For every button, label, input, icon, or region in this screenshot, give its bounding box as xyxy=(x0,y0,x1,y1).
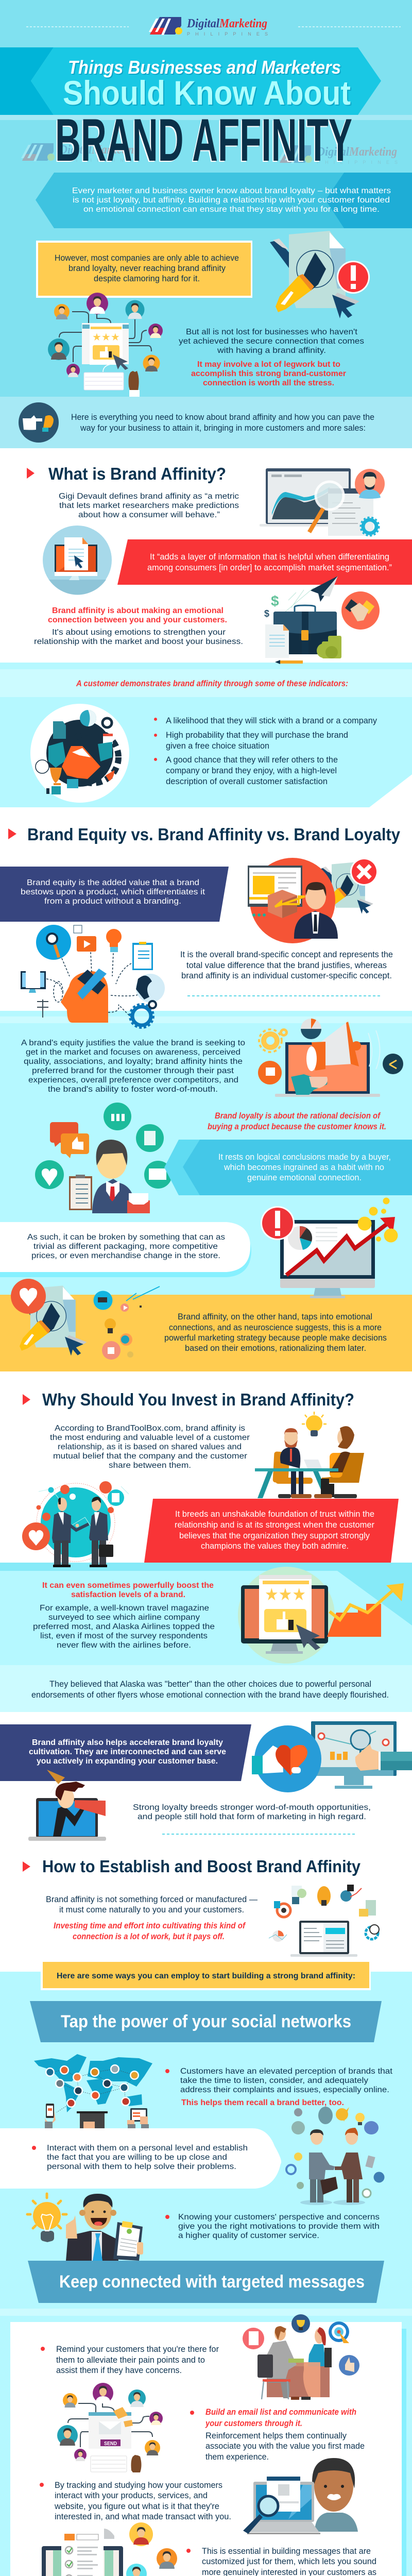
ribbon: logical conclusions: It rests on logical conclusions made by a buyer, xyxy=(218,1152,391,1162)
list item: remind customers: Remind your customers that you're there for xyxy=(56,2344,219,2354)
text block: brand equity justifies: A brand's equity justifies the value the brand is seeking to xyxy=(21,1039,245,1047)
title: Should Know About xyxy=(63,74,351,112)
text block: brand loyalty: buying a product because the customer knows it. xyxy=(208,1122,386,1131)
text block: affinity on yellow xyxy=(164,1312,387,1353)
text block: brand loyalty: Brand loyalty is about the rational decision of xyxy=(215,1111,381,1121)
title: Things Businesses and Marketers xyxy=(68,57,341,78)
list item: tracking: interested in, and what made transact with you. xyxy=(55,2512,231,2521)
text block: affinity on yellow: based on their emotions, rationalizing them later. xyxy=(185,1343,366,1353)
illustration: laptop with business icons xyxy=(269,1885,379,1957)
text block: satisfaction example xyxy=(33,1581,215,1650)
illustration: businessmen handshake xyxy=(22,1481,129,1567)
text block: definition: Gigi Devault defines brand affinity as “a metric xyxy=(59,492,239,501)
text block: not forced xyxy=(46,1894,258,1941)
red panel: trust: relationship and is at its strongest when the customer xyxy=(175,1520,374,1530)
text block: not lost: yet achieved the secure connection that comes xyxy=(179,337,364,346)
text block: brandtoolbox: According to BrandToolBox.com, brand affinity is xyxy=(55,1424,245,1433)
ribbon: logical conclusions: genuine emotional connection. xyxy=(247,1173,362,1182)
illustration: heart and thumbs up monitor xyxy=(252,1721,412,1792)
text block: not lost: But all is not lost for businesses who haven't xyxy=(186,328,358,336)
icon: handshake gear in white circle xyxy=(30,704,129,803)
list item: essential messages: customized just for them, which lets you sound xyxy=(202,2556,376,2566)
list item: essential messages xyxy=(186,2546,376,2576)
text block: brand equity justifies: quality, associations, and loyalty; brand affinity hints the xyxy=(24,1057,243,1066)
red panel: trust: believes that the organization they support strongly xyxy=(179,1531,370,1540)
illustration: pen tool with heart and icons xyxy=(11,1279,160,1360)
text block: satisfaction example: never flew with the airlines before. xyxy=(57,1641,191,1650)
white pill: interact: personal with them to help solve their problems. xyxy=(47,2162,236,2171)
text block: brandtoolbox: relationship, as it is based on shared values and xyxy=(58,1443,242,1451)
text block: not lost xyxy=(179,328,364,387)
list item: remind customers: them to alleviate their pain points and to xyxy=(56,2355,205,2365)
white pill: can be broken: As such, it can be broken by something that can as xyxy=(27,1233,225,1242)
list: indicators: A good chance that they will refer others to the xyxy=(166,755,338,765)
text block: overall concept: brand affinity is an individual customer-specific concept. xyxy=(181,971,392,980)
ribbon: logical conclusions xyxy=(164,1140,412,1195)
text block: not lost: accomplish this strong brand-customer xyxy=(191,369,346,378)
intro ribbon: is not just loyalty, but affinity. Building a relationship with your customer founded xyxy=(73,196,390,205)
illustration: email network: SEND xyxy=(104,2441,117,2447)
list item: tracking: interact with your products, services, and xyxy=(55,2490,208,2500)
title xyxy=(21,57,398,174)
ribbon: logical conclusions: which becomes ingrained as a habit with no xyxy=(224,1162,384,1172)
red panel: trust: champions the values they both admire. xyxy=(201,1541,349,1551)
red panel: trust: It breeds an unshakable foundation of trust within the xyxy=(175,1509,374,1519)
callout: ways to build xyxy=(41,1962,371,1990)
callout: yellow box xyxy=(36,241,252,298)
text block: they believed xyxy=(31,1679,389,1700)
illustration: head with ideas xyxy=(21,925,165,1028)
list: indicators: company or brand they enjoy, with a high-level xyxy=(166,766,337,775)
intro ribbon: on emotional connection can ensure that they stay with you for a long time. xyxy=(83,205,380,214)
white pill: can be broken: trivial as different packaging, more competitive xyxy=(33,1242,218,1251)
illustration: rating monitor and growth chart xyxy=(238,1567,404,1664)
text block: not lost: with having a brand affinity. xyxy=(217,346,326,355)
heading: why invest: Why Should You Invest in Brand Affinity? xyxy=(42,1390,354,1409)
illustration: office consultation xyxy=(243,2314,359,2400)
text block: affinity on yellow: Brand affinity, on the other hand, taps into emotional xyxy=(178,1312,372,1321)
text block: brandtoolbox: the most enduring and valuable level of a customer xyxy=(50,1433,250,1442)
text block: brand loyalty xyxy=(208,1111,386,1131)
list item: elevated perception: address their complaints and issues, especially online. xyxy=(180,2086,389,2094)
list item: customers' perspective: give you the right motivations to provide them with xyxy=(178,2222,380,2231)
illustration: man with laptop and magnifier xyxy=(243,2458,358,2534)
text block: what you need to know: Here is everything you need to know about brand affinity and how you can pave the xyxy=(71,412,374,422)
text block: satisfaction example: preferred most, and Alaska Airlines topped the xyxy=(33,1622,215,1631)
illustration: partners shaking hands xyxy=(286,2107,384,2205)
heading: how to establish: How to Establish and Boost Brand Affinity xyxy=(42,1857,361,1876)
list: indicators: given a free choice situation xyxy=(166,741,269,751)
list: indicators: description of overall customer satisfaction xyxy=(166,776,328,786)
text block: emotional connection: It's about using emotions to strengthen your xyxy=(52,628,226,637)
white pill: interact: the fact that you are willing to be up close and xyxy=(47,2153,227,2162)
red quote banner: It “adds a layer of information that is helpful when differentiating xyxy=(150,552,389,562)
callout: ways to build: Here are some ways you can employ to start building a strong brand affinity: xyxy=(57,1972,355,1980)
icon: monitor on blue circle xyxy=(43,526,112,595)
text block: emotional connection xyxy=(34,606,243,646)
white pill: interact xyxy=(0,2128,281,2189)
illustration: monitor with rising arrow xyxy=(261,1197,398,1298)
list item: elevated perception: This helps them recall a brand better, too. xyxy=(181,2098,344,2107)
illustration: businessman with product xyxy=(248,858,378,943)
text block: brand equity justifies: get in the market and focuses on awareness, perceived xyxy=(26,1048,241,1057)
list item: remind customers: assist them if they have concerns. xyxy=(56,2365,182,2375)
text block: strong loyalty: Strong loyalty breeds stronger word-of-mouth opportunities, xyxy=(133,1803,371,1812)
text block: not forced: Brand affinity is not something forced or manufactured — xyxy=(46,1894,258,1904)
callout: yellow box: brand loyalty, never reaching brand affinity xyxy=(68,263,226,273)
white pill: interact: Interact with them on a personal level and establish xyxy=(47,2144,248,2153)
navy panel: brand equity definition: from a product without a branding. xyxy=(44,897,181,906)
callout: yellow box: despite clamoring hard for it. xyxy=(94,274,200,283)
banner: keep connected xyxy=(28,2261,384,2303)
heading: what is brand affinity: What is Brand Affinity? xyxy=(48,464,226,483)
text block: overall concept: total value difference that the brand justifies, whereas xyxy=(186,960,387,970)
text block: emotional connection: relationship with the market and boost your business. xyxy=(34,637,243,646)
callout: yellow box: However, most companies are only able to achieve xyxy=(55,253,239,263)
navy panel: accelerates loyalty: Brand affinity also helps accelerate brand loyalty xyxy=(32,1738,223,1747)
text block: brandtoolbox: mutual belief that the company and the customer xyxy=(53,1452,247,1461)
white pill: can be broken xyxy=(0,1222,251,1277)
illustration: two men meeting xyxy=(255,1412,364,1498)
logo: top header xyxy=(26,17,401,37)
illustration: monitor checklist and avatars xyxy=(42,2522,177,2576)
illustration: rating monitor and growth chart: ★★★ xyxy=(265,1585,306,1604)
text block: brand equity justifies: the brand's ability to foster word-of-mouth. xyxy=(48,1085,218,1094)
title ribbon xyxy=(0,47,381,115)
text block: affinity on yellow: connections, and as neuroscience suggests, this is a more xyxy=(169,1323,382,1332)
text block: emotional connection: Brand affinity is about making an emotional xyxy=(52,606,224,615)
banner: keep connected: Keep connected with targeted messages xyxy=(59,2272,365,2292)
list item: email list: Reinforcement helps them continually xyxy=(205,2431,347,2441)
illustration: man with megaphone on laptop xyxy=(28,1770,106,1841)
illustration: briefcase and coins: $ xyxy=(264,608,269,619)
illustration: megaphone on screen xyxy=(258,1019,403,1097)
illustration: customer network with rating panel xyxy=(48,293,163,397)
navy panel: brand equity definition: Brand equity is the added value that a brand xyxy=(27,878,199,887)
text block: emotional connection: connection between you and your customers. xyxy=(48,616,227,624)
text block: overall concept xyxy=(180,950,393,996)
text block: brandtoolbox xyxy=(50,1424,250,1470)
illustration: world map with people xyxy=(34,2054,152,2128)
list item: email list xyxy=(190,2407,365,2462)
text block: satisfaction example: It can even sometimes powerfully boost the xyxy=(42,1581,214,1590)
list item: email list: your customers through it. xyxy=(205,2418,302,2428)
red panel: trust xyxy=(144,1499,399,1563)
list item: tracking: website, you figure out what is it that they're xyxy=(54,2501,219,2511)
illustration: email network xyxy=(57,2383,163,2472)
text block: brand equity justifies xyxy=(21,1039,245,1094)
icon: pointing hand and bulb xyxy=(19,402,59,443)
navy panel: accelerates loyalty: cultivation. They are interconnected and can serve xyxy=(29,1748,226,1756)
list item: tracking: By tracking and studying how your customers xyxy=(55,2480,222,2490)
navy panel: brand equity definition xyxy=(0,867,229,922)
text block: definition: that lets market researchers make predictions xyxy=(59,501,239,510)
illustration: man with bulb and clipboard xyxy=(27,2194,143,2261)
text block: not lost: It may involve a lot of legwork but to xyxy=(197,360,340,369)
text block: strong loyalty: and people still hold that form of marketing in high regard. xyxy=(138,1812,366,1821)
callout: indicators heading: A customer demonstrates brand affinity through some of these indicators: xyxy=(76,679,348,688)
list item: customers' perspective: a higher quality of customer service. xyxy=(178,2231,319,2240)
text block: strong loyalty xyxy=(133,1803,371,1834)
text block: not forced: connection is a lot of work, but it pays off. xyxy=(73,1931,225,1941)
illustration: briefcase and coins: $ xyxy=(271,593,279,609)
text block: not forced: it must come naturally to you and your customers. xyxy=(59,1905,244,1914)
list item: elevated perception: Customers have an elevated perception of brands that xyxy=(180,2067,393,2076)
list item: email list: them experience. xyxy=(205,2452,269,2462)
text block: not lost: connection is worth all the stress. xyxy=(203,379,334,387)
text block: satisfaction example: For example, a well-known travel magazine xyxy=(40,1604,209,1613)
list item: tracking xyxy=(40,2480,231,2521)
text block: affinity on yellow: powerful marketing strategy because people make decisions xyxy=(164,1333,387,1343)
text block: brand equity justifies: preferred brand for the customer through their past xyxy=(32,1066,234,1075)
list item: email list: Build an email list and communicate with xyxy=(205,2407,356,2417)
list item: elevated perception xyxy=(165,2067,393,2107)
text block: not forced: Investing time and effort into cultivating this kind of xyxy=(54,1921,246,1930)
text block: satisfaction example: satisfaction levels of a brand. xyxy=(71,1590,185,1599)
rating stars: ★★★ xyxy=(92,332,120,343)
red quote banner: among consumers [in order] to accomplish market segmentation.” xyxy=(147,563,392,572)
text block: definition xyxy=(59,492,239,519)
text block: they believed: endorsements of other flyers whose emotional connection with the brand have deeply flourished. xyxy=(31,1690,389,1700)
illustration: briefcase and coins xyxy=(264,576,380,664)
list item: essential messages: This is essential in building messages that are xyxy=(202,2546,371,2556)
list item: customers' perspective xyxy=(165,2213,380,2240)
navy panel: brand equity definition: bestows upon a product, which differentiates it xyxy=(21,888,205,896)
navy panel: accelerates loyalty: you actively in expanding your customer base. xyxy=(37,1757,218,1766)
text block: they believed: They believed that Alaska was "better" than the other choices due to powerful personal xyxy=(49,1679,371,1689)
list item: elevated perception: take the time to listen, consider, and adequately xyxy=(180,2076,368,2085)
list item: customers' perspective: Knowing your customers' perspective and concerns xyxy=(178,2213,380,2222)
watermark logos xyxy=(21,143,398,165)
banner: tap the power xyxy=(30,2001,382,2042)
list item: email list: associate you with the value you first made xyxy=(205,2441,365,2451)
intro ribbon xyxy=(36,173,412,228)
list: indicators: A likelihood that they will stick with a brand or a company xyxy=(166,716,377,725)
text block: what you need to know xyxy=(71,412,374,433)
list: indicators xyxy=(154,716,377,786)
white card: targeted messages xyxy=(10,2322,406,2576)
banner: tap the power: Tap the power of your social networks xyxy=(61,2012,351,2031)
text block: definition: about how a consumer will behave.” xyxy=(78,511,220,519)
text block: satisfaction example: surveyed to see which airline company xyxy=(48,1613,200,1622)
white pill: can be broken: prices, or even merchandise change in the store. xyxy=(31,1251,220,1260)
intro ribbon: Every marketer and business owner know about brand loyalty – but what matters xyxy=(72,187,391,195)
text block: overall concept: It is the overall brand-specific concept and represents the xyxy=(180,950,393,959)
text block: brandtoolbox: share between them. xyxy=(109,1461,191,1470)
list: indicators: High probability that they will purchase the brand xyxy=(166,730,348,740)
red quote banner xyxy=(117,539,412,585)
illustration: businessman with icons xyxy=(35,1103,172,1213)
text block: brand equity justifies: experiences, overall preference over competitors, and xyxy=(28,1076,238,1084)
navy panel: accelerates loyalty xyxy=(0,1724,251,1781)
text block: satisfaction example: list, even if most of the survey respondents xyxy=(40,1632,208,1640)
icon: pen tool with alert xyxy=(270,231,370,318)
illustration: laptop analytics xyxy=(260,468,385,536)
list item: remind customers xyxy=(41,2344,219,2375)
text block: what you need to know: way for your business to attain it, bringing in more customers and more sales: xyxy=(80,423,366,433)
